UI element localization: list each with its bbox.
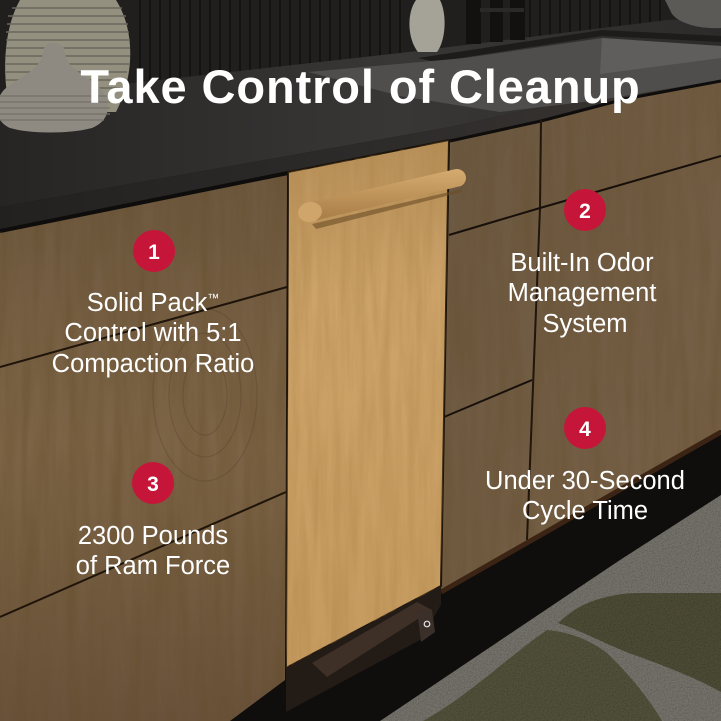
feature 3	[76, 462, 230, 580]
badge 3: 3	[147, 473, 159, 496]
sink basin	[308, 30, 721, 112]
feature 3 text: 2300 Pounds	[78, 522, 228, 550]
left cabinet panels	[0, 165, 288, 721]
badge 1: 1	[148, 241, 160, 264]
corner bowl	[665, 0, 721, 28]
feature 2	[508, 189, 656, 338]
badge 2: 2	[579, 200, 591, 223]
tall ribbed vase	[5, 0, 130, 112]
feature 1 text: Control with 5:1	[64, 319, 242, 347]
badge 3	[132, 462, 174, 504]
badge 1	[133, 230, 175, 272]
feature 2 text: Built-In Odor	[510, 249, 654, 277]
badge 2	[564, 189, 606, 231]
feature 2 text: Management	[508, 279, 656, 307]
short round vase	[0, 43, 110, 132]
feature 1 text: Solid Pack	[87, 289, 219, 317]
faucet	[466, 0, 525, 44]
title: Take Control of Cleanup	[80, 60, 641, 113]
panel handle	[296, 169, 466, 229]
badge 4: 4	[579, 418, 591, 441]
feature 4 text: Under 30-Second	[485, 467, 685, 495]
feature 4 text: Cycle Time	[522, 497, 648, 525]
feature 2 text: System	[542, 310, 628, 338]
toe kick and control bar	[286, 586, 441, 712]
right cabinet panels	[441, 80, 721, 595]
feature 4	[485, 407, 685, 525]
floor rug	[380, 495, 721, 721]
countertop	[0, 18, 721, 230]
feature 1 text: Compaction Ratio	[52, 350, 254, 378]
dishwasher wood panel	[286, 140, 449, 670]
feature 3 text: of Ram Force	[76, 552, 230, 580]
feature 1	[52, 230, 254, 378]
badge 4	[564, 407, 606, 449]
feature 1 text: ™	[207, 291, 219, 305]
stone cup	[409, 0, 445, 52]
